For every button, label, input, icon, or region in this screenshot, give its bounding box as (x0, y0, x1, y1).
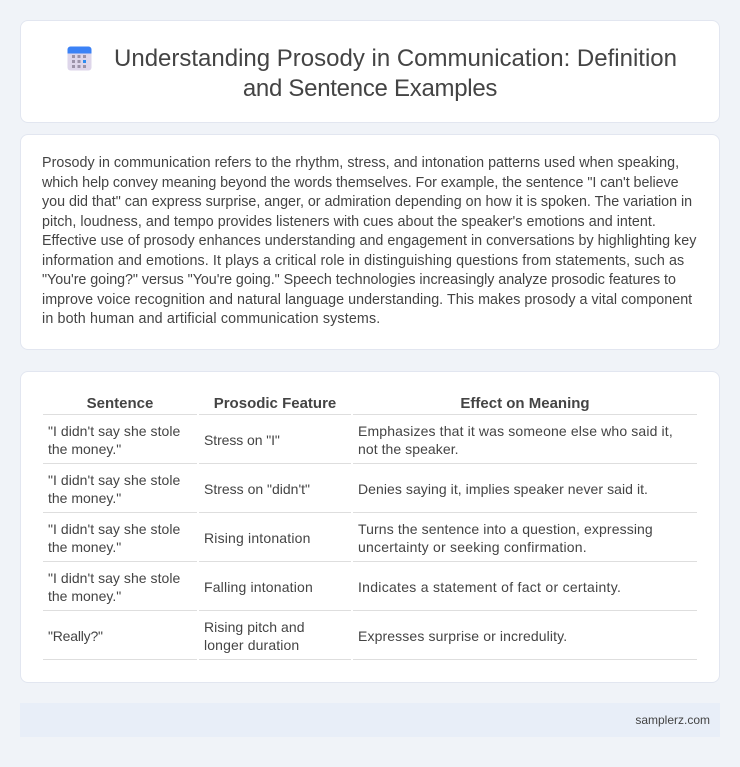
text block: intro paragraph: improve voice recognition and natural language understanding. This makes prosody a vital component (42, 292, 692, 308)
table header: Effect on Meaning (460, 395, 590, 412)
table row 4 (48, 570, 621, 604)
table row 3: "I didn't say she stole (48, 521, 180, 537)
footer text: samplerz.com (635, 713, 710, 727)
title: and Sentence Examples (243, 75, 497, 102)
footer bar (20, 703, 720, 737)
text block: intro paragraph: in both human and artificial communication systems. (42, 311, 380, 327)
table row 1 (48, 423, 673, 457)
text block: intro paragraph: which help convey meaning beyond the words themselves. For example, the sentence "I can't believe (42, 175, 678, 191)
table row 1: "I didn't say she stole (48, 423, 180, 439)
text block: intro paragraph: Prosody in communication refers to the rhythm, stress, and intonation patterns used when speaking, (42, 155, 679, 171)
table header (87, 395, 590, 412)
text block: intro paragraph: information and emotions. It plays a critical role in distinguishing questions from statements, such as (42, 253, 684, 269)
table row 2: "I didn't say she stole (48, 472, 180, 488)
panel: title card (20, 20, 720, 123)
table row 4: Falling intonation (204, 579, 313, 595)
table row 4: "I didn't say she stole (48, 570, 180, 586)
table row 3: uncertainty or seeking confirmation. (358, 539, 587, 555)
icon: calendar (68, 46, 92, 70)
table row 1: not the speaker. (358, 441, 459, 457)
text block: intro paragraph: pitch, loudness, and tempo provides listeners with cues about the speaker's emotions and intent. (42, 214, 656, 230)
table header: Prosodic Feature (214, 395, 336, 412)
table row 1: the money." (48, 441, 121, 457)
table row 4: Indicates a statement of fact or certainty. (358, 579, 621, 595)
table row 5: longer duration (204, 637, 299, 653)
table row 2 (48, 472, 648, 506)
text block: intro paragraph: you did that" can express surprise, anger, or admiration depending on how it is spoken. The variation in (42, 194, 692, 210)
panel: table card (20, 371, 720, 683)
text block: intro paragraph (42, 155, 696, 327)
table row 3 (48, 521, 653, 555)
title (114, 45, 677, 102)
title: Understanding Prosody in Communication: Definition (114, 45, 677, 72)
table row 3: Turns the sentence into a question, expressing (358, 521, 653, 537)
table row 1: Emphasizes that it was someone else who said it, (358, 423, 673, 439)
table row 4: the money." (48, 588, 121, 604)
table row 3: Rising intonation (204, 530, 311, 546)
table row 2: Stress on "didn't" (204, 481, 310, 497)
table header: Sentence (87, 395, 153, 412)
table row 2: Denies saying it, implies speaker never said it. (358, 481, 648, 497)
table row 5 (48, 619, 567, 653)
table row 5: Expresses surprise or incredulity. (358, 628, 567, 644)
table row 1: Stress on "I" (204, 432, 280, 448)
text block: intro paragraph: Effective use of prosody enhances understanding and engagement in conversations by highlighting key (42, 233, 696, 249)
table row 5: "Really?" (48, 628, 103, 644)
table row 2: the money." (48, 490, 121, 506)
text block: intro paragraph: "You're going?" versus "You're going." Speech technologies increasingly analyze prosodic features to (42, 272, 676, 288)
panel: intro paragraph card (20, 134, 720, 350)
table row 5: Rising pitch and (204, 619, 305, 635)
table row 3: the money." (48, 539, 121, 555)
